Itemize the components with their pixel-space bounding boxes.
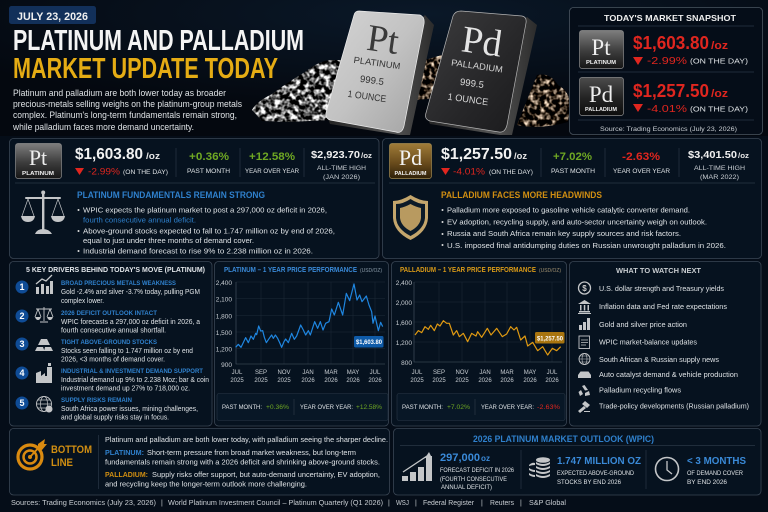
palladium tile: Pd xyxy=(399,145,422,170)
panel: 5 key drivers xyxy=(10,262,212,426)
palladium performance strip xyxy=(397,394,565,420)
palladium line chart xyxy=(396,280,562,384)
sources footer: World Platinum Investment Council – Platinum Quarterly (Q1 2026) xyxy=(168,500,383,507)
watch item: document: WPIC market-balance updates xyxy=(599,340,698,346)
palladium bar: 999.5 xyxy=(459,77,485,91)
bottom line summary text: Platinum and palladium are both lower today, with palladium seeing the sharper decline. xyxy=(105,435,388,444)
palladium performance strip: +7.02% xyxy=(447,404,470,411)
palladium price block: (ON THE DAY) xyxy=(489,169,533,176)
palladium price block: /oz xyxy=(514,151,528,161)
snapshot source: Source: Trading Economics (July 23, 2026) xyxy=(600,126,737,133)
driver 1 xyxy=(16,275,200,305)
platinum performance strip xyxy=(217,394,388,420)
palladium price: -4.01% xyxy=(647,103,687,115)
sources footer: | xyxy=(481,500,483,507)
bottom line summary text xyxy=(105,435,388,488)
sources footer: S&P Global xyxy=(529,500,566,507)
watch item: dollar: $ xyxy=(582,284,587,293)
palladium bar: Pd xyxy=(459,18,505,66)
all-time high stat: (JAN 2026) xyxy=(323,174,360,181)
all-time high stat: /oz xyxy=(738,153,750,160)
all-time high stat: ALL-TIME HIGH xyxy=(694,165,745,172)
palladium line chart: 2026 xyxy=(478,378,492,384)
platinum line chart: 2025 xyxy=(277,378,291,384)
palladium price block xyxy=(441,146,533,176)
outlook stat: cover xyxy=(687,455,746,486)
palladium bullet list: Palladium more exposed to gasoline vehicle catalytic converter demand. xyxy=(447,208,690,214)
outlook stat: stocks: EXPECTED ABOVE-GROUND xyxy=(557,471,635,477)
intro paragraph: Platinum and palladium are both lower today as broader xyxy=(13,88,226,98)
platinum price: (ON THE DAY) xyxy=(690,56,749,66)
platinum bar xyxy=(326,11,434,135)
driver 3: Stocks seen falling to 1.747 million oz by end xyxy=(61,348,193,355)
platinum line chart: 2026 xyxy=(368,378,382,384)
driver 4: 4 xyxy=(19,368,25,378)
watch item: document xyxy=(579,336,698,348)
platinum price tag: $1,603.80 xyxy=(356,339,382,346)
platinum bullet list: WPIC expects the platinum market to post a 297,000 oz deficit in 2026, xyxy=(83,208,327,214)
bottom line label: LINE xyxy=(51,457,73,469)
palladium price block: -4.01% xyxy=(453,166,485,176)
driver 3 xyxy=(16,338,193,364)
outlook stat: deficit: FORECAST DEFICIT IN 2026 xyxy=(440,468,515,474)
outlook stat: deficit: ANNUAL DEFICIT) xyxy=(441,485,492,491)
platinum line chart: 2026 xyxy=(346,378,360,384)
bottom line summary text: fundamentals remain strong with a 2026 deficit and shrinking above-ground stocks. xyxy=(105,458,380,466)
platinum performance strip: +12.58% xyxy=(356,404,382,411)
icon: balance scales xyxy=(21,190,65,234)
outlook stat: cover: BY END 2026 xyxy=(687,480,728,486)
past month stat: +0.36% xyxy=(189,151,229,163)
intro paragraph: precious-metals selling weighs on the platinum-group metals xyxy=(13,99,242,109)
year over year stat: +12.58% xyxy=(249,151,295,163)
platinum chart heading: (USD/OZ) xyxy=(360,268,382,274)
palladium line chart: JAN xyxy=(479,370,491,376)
platinum line chart: NOV xyxy=(277,370,291,376)
bottom line label xyxy=(51,444,92,469)
sources footer: WSJ xyxy=(396,500,409,507)
palladium line chart: 2025 xyxy=(410,378,424,384)
palladium line chart: 2025 xyxy=(432,378,446,384)
platinum performance strip: YEAR OVER YEAR: xyxy=(300,404,353,411)
palladium line chart: 2,400 xyxy=(396,280,412,287)
icon: rising bars xyxy=(402,452,432,481)
driver 2: fourth consecutive annual shortfall. xyxy=(61,328,166,334)
palladium line chart: MAR xyxy=(500,370,514,376)
title: MARKET UPDATE TODAY xyxy=(13,53,278,85)
outlook stat: stocks: 1.747 MILLION OZ xyxy=(557,455,642,467)
driver 3: 2026, <3 months of demand cover. xyxy=(61,356,165,364)
platinum line chart: 2,100 xyxy=(216,296,232,304)
driver 1: BROAD PRECIOUS METALS WEAKNESS xyxy=(61,280,176,287)
platinum performance strip: PAST MONTH: xyxy=(222,404,262,411)
platinum line chart: 2026 xyxy=(301,378,315,384)
panel: bottom line xyxy=(10,428,390,495)
palladium tile: Pd xyxy=(589,82,614,107)
metal nuggets right xyxy=(416,55,570,127)
date badge: JULY 23, 2026 xyxy=(17,11,88,23)
platinum price block: -2.99% xyxy=(88,166,120,176)
platinum line chart: 1,200 xyxy=(216,346,232,354)
palladium price: (ON THE DAY) xyxy=(690,104,749,114)
platinum performance strip: +0.36% xyxy=(266,404,289,411)
bottom line summary text: Supply risks offer support, but auto-demand uncertainty, EV adoption, xyxy=(152,470,380,479)
palladium tile: PALLADIUM xyxy=(394,171,427,177)
platinum line chart: MAY xyxy=(347,370,359,376)
platinum bar: 1 OUNCE xyxy=(347,89,387,105)
bottom line summary text: PLATINUM: xyxy=(105,448,144,457)
watch item: car: Auto catalyst demand & vehicle production xyxy=(599,372,738,379)
outlook heading: 2026 PLATINUM MARKET OUTLOOK (WPIC) xyxy=(473,434,654,444)
driver 4: investment demand up 27% to 718,000 oz. xyxy=(61,386,190,392)
platinum bar: Pt xyxy=(364,17,402,63)
sources footer: | xyxy=(520,500,522,507)
platinum line chart: 1,500 xyxy=(216,330,232,337)
palladium line chart: 2,000 xyxy=(396,300,412,307)
palladium headwinds heading: PALLADIUM FACES MORE HEADWINDS xyxy=(441,190,602,200)
all-time high stat: /oz xyxy=(361,153,373,160)
palladium line chart: JUL xyxy=(412,370,423,376)
palladium bullet list xyxy=(442,208,726,250)
platinum line chart: SEP xyxy=(255,370,267,376)
driver 5: South Africa power issues, mining challenges, xyxy=(61,406,198,413)
past month stat: +7.02% xyxy=(553,151,592,163)
panel: platinum chart xyxy=(214,262,388,426)
driver 3: 3 xyxy=(19,339,25,349)
all-time high stat xyxy=(688,149,750,181)
platinum line chart: MAR xyxy=(324,370,338,376)
bottom line summary text: Short-term pressure from broad market weakness, but long-term xyxy=(147,448,356,457)
watch item: bars xyxy=(579,318,687,330)
platinum line chart: 2025 xyxy=(230,378,244,384)
watch item: gavel xyxy=(578,401,749,413)
platinum bullet list: Industrial demand forecast to rise 9% to 2.238 million oz in 2026. xyxy=(83,248,313,256)
outlook stat: cover: < 3 MONTHS xyxy=(687,455,746,467)
palladium tile: PALLADIUM xyxy=(585,107,617,113)
intro paragraph xyxy=(12,88,242,132)
driver 5: SUPPLY RISKS REMAIN xyxy=(61,397,132,404)
sources footer xyxy=(11,500,566,507)
intro paragraph: complex. Platinum's long-term fundamentals remain strong, xyxy=(13,110,237,120)
intro paragraph: while palladium faces more demand uncertainty. xyxy=(12,122,194,132)
driver 5: and global supply risks stay in focus. xyxy=(61,414,169,422)
year over year stat xyxy=(613,151,670,175)
all-time high stat: ALL-TIME HIGH xyxy=(317,165,366,172)
driver 3: TIGHT ABOVE-GROUND STOCKS xyxy=(61,339,157,346)
platinum fundamentals heading: PLATINUM FUNDAMENTALS REMAIN STRONG xyxy=(77,190,265,200)
panel: 2026 platinum market outlook xyxy=(394,428,761,495)
driver 2: 2 xyxy=(19,311,25,321)
watch item: recycle xyxy=(578,385,682,396)
platinum line chart: 2,400 xyxy=(216,280,232,287)
watch item: bank: Inflation data and Fed rate expectations xyxy=(599,304,728,311)
outlook stat: deficit: oz xyxy=(481,454,490,463)
palladium line chart: NOV xyxy=(455,370,469,376)
driver 4: INDUSTRIAL & INVESTMENT DEMAND SUPPORT xyxy=(61,368,204,375)
platinum line chart: 2026 xyxy=(324,378,338,384)
watch item: globe xyxy=(579,354,720,364)
watch item: dollar: U.S. dollar strength and Treasury yields xyxy=(599,286,725,293)
outlook stat: deficit: (FOURTH CONSECUTIVE xyxy=(440,477,507,483)
platinum bullet list: equal to just under three months of demand cover. xyxy=(83,238,254,245)
past month stat: PAST MONTH xyxy=(551,168,595,175)
palladium line chart: SEP xyxy=(433,370,445,376)
all-time high stat: (MAR 2022) xyxy=(700,174,739,181)
palladium bar xyxy=(425,11,537,135)
icon: clock xyxy=(656,458,678,480)
outlook stat: stocks: STOCKS BY END 2026 xyxy=(557,480,622,486)
driver 1: 1 xyxy=(19,282,25,292)
platinum line chart: 900 xyxy=(221,362,232,369)
watch item: recycle: Palladium recycling flows xyxy=(599,388,682,394)
driver 2 xyxy=(16,307,200,334)
platinum tile xyxy=(16,144,62,178)
platinum bar: PLATINUM xyxy=(353,55,401,71)
platinum bullet list xyxy=(78,208,335,256)
driver 4: Industrial demand up 9% to 2.238 Moz; bar & coin xyxy=(61,377,209,384)
metal nuggets left xyxy=(252,60,342,122)
platinum price block: $1,603.80 xyxy=(75,146,143,163)
palladium line chart: 2026 xyxy=(523,378,537,384)
palladium line chart: JUL xyxy=(547,370,558,376)
platinum bar: 999.5 xyxy=(359,74,385,88)
driver 1: complex lower. xyxy=(61,298,104,305)
palladium price tag: $1,257.50 xyxy=(537,336,563,342)
palladium price tag xyxy=(535,332,564,344)
snapshot heading: TODAY'S MARKET SNAPSHOT xyxy=(604,13,737,23)
sources footer: | xyxy=(415,500,417,507)
panel: platinum summary xyxy=(10,138,379,258)
outlook stat: stocks xyxy=(557,455,642,486)
panel: today's market snapshot xyxy=(570,8,762,134)
platinum bullet list: Above-ground stocks expected to fall to 1.747 million oz by end of 2026, xyxy=(83,228,335,236)
watch item: bank xyxy=(578,300,728,314)
bottom line summary text: PALLADIUM: xyxy=(105,470,148,479)
palladium price xyxy=(633,81,749,115)
platinum tile: Pt xyxy=(591,35,611,60)
palladium chart heading: (USD/OZ) xyxy=(539,268,561,274)
watch item: globe: South African & Russian supply news xyxy=(599,357,720,364)
all-time high stat xyxy=(311,149,373,181)
driver 5: 5 xyxy=(19,398,25,408)
watch item: bars: Gold and silver price action xyxy=(599,322,687,329)
platinum price block xyxy=(75,146,168,176)
past month stat xyxy=(551,151,595,175)
sources footer: Federal Register xyxy=(423,500,475,507)
palladium price: /oz xyxy=(711,88,729,100)
driver 4 xyxy=(16,363,209,392)
outlook stat: deficit xyxy=(440,452,515,491)
palladium line chart: 1,200 xyxy=(396,340,412,347)
panel: palladium summary xyxy=(382,138,762,258)
platinum line chart: JUL xyxy=(232,370,243,376)
year over year stat: -2.63% xyxy=(622,151,660,163)
bottom line label: BOTTOM xyxy=(51,444,92,456)
palladium chart heading: PALLADIUM – 1 YEAR PRICE PERFORMANCE xyxy=(400,265,536,274)
icon: coin stack xyxy=(529,457,550,478)
sources footer: Reuters xyxy=(490,500,514,507)
platinum line chart xyxy=(216,280,385,384)
platinum tile: PLATINUM xyxy=(586,60,616,66)
platinum tile xyxy=(580,30,624,68)
palladium bar: PALLADIUM xyxy=(451,57,503,75)
watch item: gavel: Trade-policy developments (Russian palladium) xyxy=(599,404,749,410)
platinum line chart: 1,800 xyxy=(216,314,232,320)
palladium tile xyxy=(390,144,432,178)
bottom line summary text: and recycling keep the longer-term outlook more challenging. xyxy=(105,480,307,488)
palladium line chart: 2026 xyxy=(545,378,559,384)
palladium price: $1,257.50 xyxy=(633,81,709,101)
platinum price: $1,603.80 xyxy=(633,33,709,53)
title xyxy=(13,25,304,85)
platinum line chart: 2025 xyxy=(254,378,268,384)
platinum tile: PLATINUM xyxy=(22,171,54,177)
palladium tile xyxy=(580,78,624,116)
date badge xyxy=(9,6,96,24)
palladium price block: $1,257.50 xyxy=(441,146,512,163)
watch item: dollar xyxy=(578,282,725,294)
platinum chart heading: PLATINUM – 1 YEAR PRICE PERFORMANCE xyxy=(224,265,357,274)
outlook stat: cover: OF DEMAND COVER xyxy=(687,471,744,477)
panel: palladium chart xyxy=(392,262,566,426)
palladium line chart: 2026 xyxy=(500,378,514,384)
platinum price xyxy=(633,33,749,67)
platinum price block: (ON THE DAY) xyxy=(123,169,168,176)
driver 1: Gold -2.4% and silver -3.7% today, pulling PGM xyxy=(61,289,200,296)
palladium performance strip: YEAR OVER YEAR: xyxy=(481,404,534,411)
palladium bullet list: U.S. imposed final antidumping duties on Russian unwrought palladium in 2026. xyxy=(447,243,726,250)
sources footer: | xyxy=(161,500,163,507)
sources footer: Sources: Trading Economics (July 23, 2026) xyxy=(11,500,156,507)
year over year stat: YEAR OVER YEAR xyxy=(613,168,670,175)
title: PLATINUM AND PALLADIUM xyxy=(13,25,304,57)
outlook stat: deficit: 297,000 xyxy=(440,452,480,464)
platinum line chart: JUL xyxy=(370,370,381,376)
platinum bullet list: fourth consecutive annual deficit. xyxy=(83,218,196,224)
palladium line chart: 2025 xyxy=(455,378,469,384)
platinum line chart: JAN xyxy=(302,370,314,376)
palladium bullet list: EV adoption, recycling supply, and auto-sector uncertainty weigh on outlook. xyxy=(447,220,707,226)
driver 2: 2026 DEFICIT OUTLOOK INTACT xyxy=(61,310,158,317)
panel: what to watch next xyxy=(570,262,761,426)
driver 2: WPIC forecasts a 297,000 oz deficit in 2026, a xyxy=(61,319,200,326)
platinum price: /oz xyxy=(711,40,729,52)
year over year stat xyxy=(245,151,299,175)
sources footer: | xyxy=(388,500,390,507)
palladium performance strip: -2.63% xyxy=(537,404,560,411)
palladium line chart: MAY xyxy=(524,370,536,376)
drivers heading: 5 KEY DRIVERS BEHIND TODAY'S MOVE (PLATINUM) xyxy=(26,265,205,274)
platinum price tag xyxy=(354,336,384,348)
all-time high stat: $3,401.50 xyxy=(688,149,737,161)
driver 5 xyxy=(16,396,198,422)
past month stat xyxy=(187,151,230,175)
palladium bullet list: Russia and South Africa remain key supply sources and risk factors. xyxy=(447,231,681,238)
watch heading: WHAT TO WATCH NEXT xyxy=(616,266,701,275)
year over year stat: YEAR OVER YEAR xyxy=(245,168,299,175)
icon: shield xyxy=(393,195,428,240)
platinum tile: Pt xyxy=(29,145,47,170)
palladium line chart: 800 xyxy=(401,360,412,367)
palladium line chart: 1,600 xyxy=(396,320,412,327)
past month stat: PAST MONTH xyxy=(187,168,230,175)
platinum price: -2.99% xyxy=(647,55,687,67)
icon: target with arrow xyxy=(18,439,47,469)
all-time high stat: $2,923.70 xyxy=(311,149,360,161)
platinum price block: /oz xyxy=(146,151,161,161)
palladium bar: 1 OUNCE xyxy=(447,92,489,108)
palladium performance strip: PAST MONTH: xyxy=(402,404,443,411)
